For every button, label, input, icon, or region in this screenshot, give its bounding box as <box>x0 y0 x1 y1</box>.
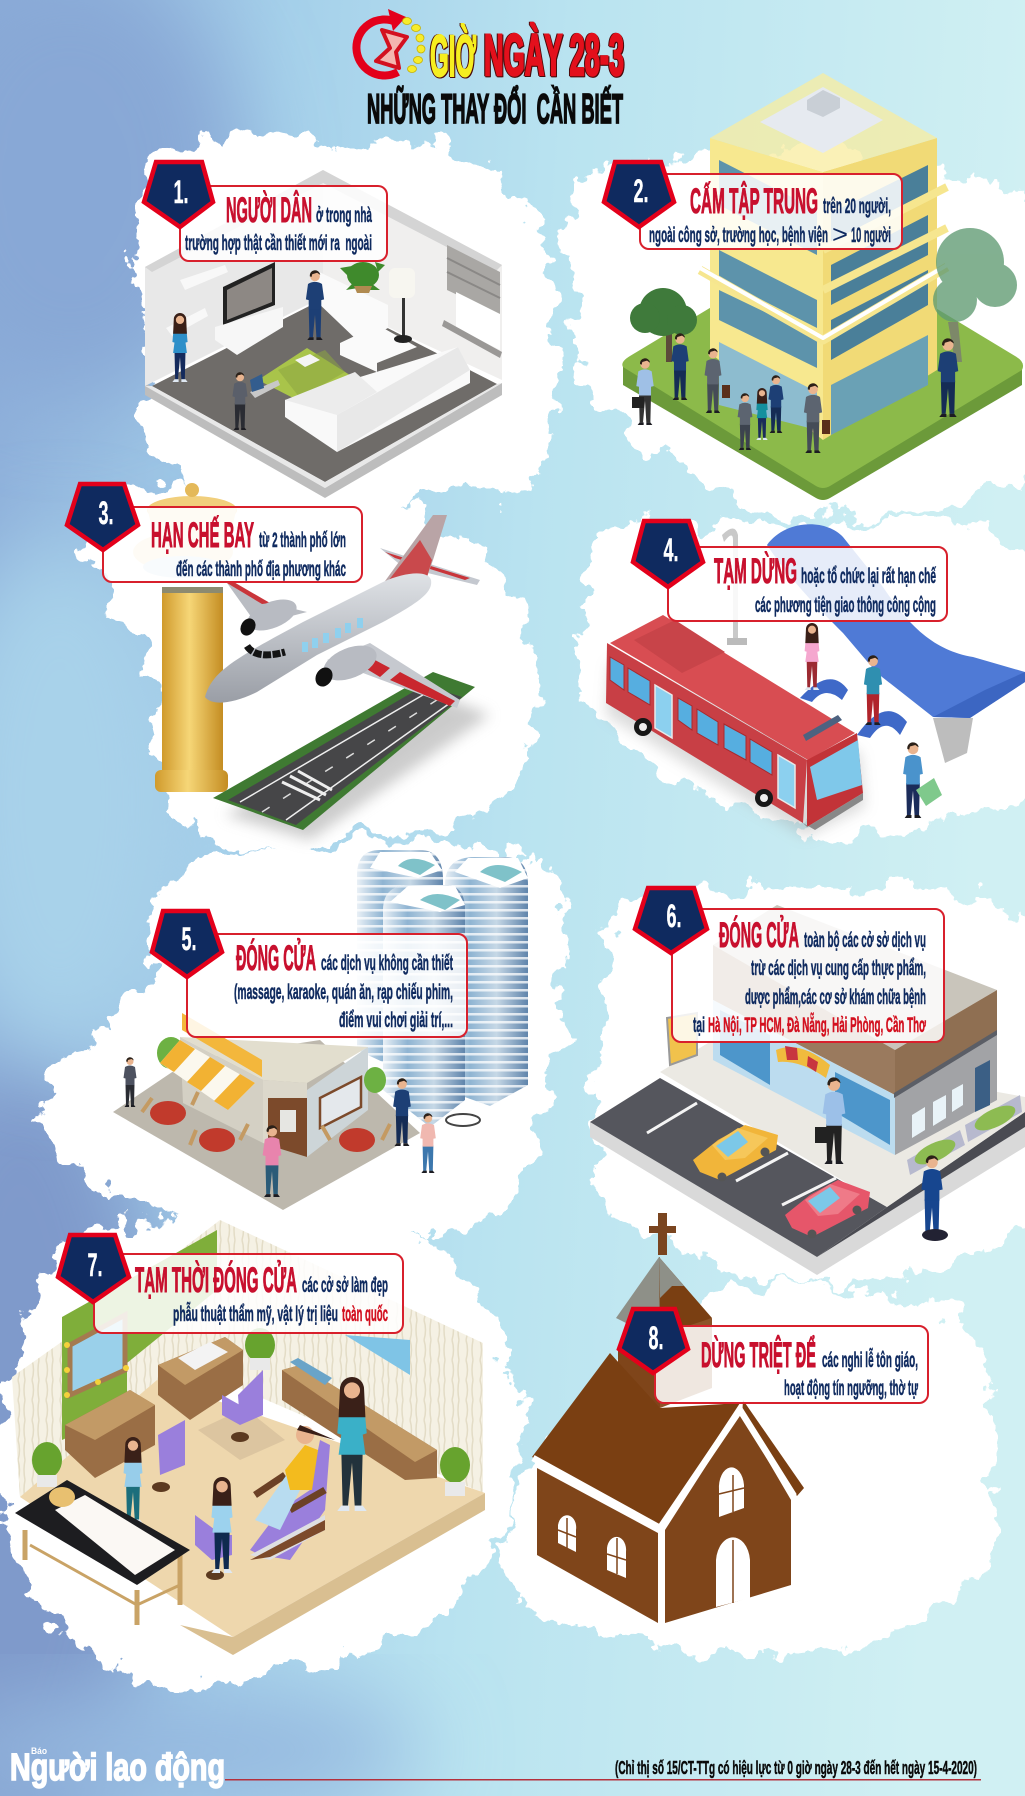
callout: TẠM DỪNG <box>714 551 797 591</box>
title <box>356 9 624 132</box>
windows and door <box>558 1467 750 1607</box>
car: taxi <box>693 1125 778 1182</box>
callout: tại <box>693 1014 705 1037</box>
callout: điểm vui chơi giải trí,... <box>339 1009 453 1032</box>
callout <box>604 162 902 249</box>
callout: DỪNG TRIỆT ĐỂ <box>701 1335 816 1375</box>
badge <box>152 911 222 977</box>
callout: ĐÓNG CỬA <box>236 938 316 978</box>
people: group <box>632 333 958 453</box>
badge <box>604 162 674 227</box>
figure: woman <box>172 313 188 382</box>
illustration: runway <box>213 672 490 840</box>
panel: 7 beauty salons <box>12 1220 485 1655</box>
callout: TẠM THỜI ĐÓNG CỬA <box>135 1260 297 1300</box>
illustration: towers <box>357 850 528 1127</box>
callout: 4. <box>664 532 678 568</box>
figures <box>124 1377 367 1573</box>
callout: HẠN CHẾ BAY <box>151 515 254 555</box>
tree <box>157 1037 185 1069</box>
icon: drone <box>446 1114 480 1126</box>
panel: 1 stay at home <box>144 162 502 498</box>
callout: phẫu thuật thẩm mỹ, vật lý trị liệu <box>173 1302 338 1326</box>
treatment chair <box>250 1440 330 1560</box>
callout: 5. <box>182 921 196 957</box>
callout: 10 người <box>851 224 891 247</box>
figure: man on phone <box>306 270 324 340</box>
illustration: control tower <box>133 483 237 792</box>
illustration: office building <box>622 73 1023 500</box>
furniture: massage bed <box>15 1480 190 1625</box>
car: red <box>785 1180 870 1238</box>
illustration: supermarket <box>590 905 1025 1275</box>
panel: 2 no gatherings <box>604 73 1023 500</box>
figure: seated man <box>232 372 280 430</box>
callout: trường hợp thật cần thiết mới ra ngoài <box>185 232 372 255</box>
panel: 3 flight limits <box>67 483 490 840</box>
title line 1: GIỜ <box>430 24 476 89</box>
callout: 1. <box>174 174 188 210</box>
illustration: bus stop <box>722 524 1025 818</box>
badge <box>619 1309 688 1373</box>
callout: CẤM TẬP TRUNG <box>690 181 818 221</box>
callout: (massage, karaoke, quán ăn, rạp chiếu phim, <box>234 981 453 1004</box>
callout: từ 2 thành phố lớn <box>259 529 346 552</box>
callout: > <box>832 219 848 249</box>
illustration: airplane <box>205 515 480 708</box>
illustration: living room <box>145 170 502 498</box>
callout <box>619 1309 928 1403</box>
panel: 8 religious events <box>532 1213 928 1626</box>
badge <box>67 484 138 550</box>
callout: ở trong nhà <box>316 204 372 227</box>
footer <box>10 1746 981 1789</box>
callout: 2. <box>634 173 648 209</box>
callout: các cở sở làm đẹp <box>302 1274 388 1297</box>
callout: các nghi lễ tôn giáo, <box>822 1348 918 1372</box>
callout <box>144 162 387 261</box>
logo: newspaper name: Báo <box>31 1746 47 1756</box>
callout <box>58 1235 403 1333</box>
callout: các dịch vụ không cần thiết <box>321 952 453 975</box>
footer rule <box>225 1779 981 1780</box>
callout: NGƯỜI DÂN <box>226 190 312 230</box>
illustration: salon <box>12 1220 485 1655</box>
callout: 8. <box>648 1320 664 1356</box>
plants <box>32 1328 470 1483</box>
logo: newspaper name: Người lao động <box>10 1747 225 1789</box>
tables <box>150 1101 375 1152</box>
awning <box>160 1040 255 1110</box>
callout: đến các thành phố địa phương khác <box>176 558 346 581</box>
text: NHỮNG THAY ĐỔI CẦN BIẾT <box>367 83 623 132</box>
benches <box>800 679 907 738</box>
badge <box>144 162 213 227</box>
badge <box>635 888 707 953</box>
callout <box>635 888 944 1042</box>
panel: 6 closed businesses <box>590 888 1025 1275</box>
callout <box>633 521 947 621</box>
figures: waiting passengers <box>805 623 942 818</box>
furniture: counters <box>65 1337 437 1480</box>
illustration: bus <box>606 615 865 837</box>
figures <box>124 1057 436 1197</box>
text: NGÀY 28-3 <box>484 23 624 88</box>
callout: trên 20 người, <box>823 195 891 218</box>
tree: left <box>630 288 697 362</box>
title line 1 <box>430 23 624 89</box>
callout: toàn quốc <box>342 1303 388 1326</box>
chairs <box>158 1370 263 1560</box>
callout <box>67 484 362 582</box>
panel: 4 public transport <box>606 521 1025 837</box>
callout: ĐÓNG CỬA <box>719 915 799 955</box>
illustration: restaurant <box>113 1013 480 1210</box>
icon: clock with hourglass <box>356 9 425 76</box>
callout <box>152 911 467 1037</box>
callout: 3. <box>98 495 114 531</box>
tree: right <box>933 228 1017 362</box>
badge <box>58 1235 129 1302</box>
callout: ngoài công sở, trường học, bệnh viện <box>649 224 828 247</box>
illustration: church <box>532 1213 804 1626</box>
callout: 6. <box>666 898 682 934</box>
callout: 7. <box>88 1247 102 1283</box>
panel: 5 closed services <box>113 850 528 1210</box>
icon: cross <box>649 1213 676 1255</box>
badge <box>633 521 703 587</box>
icon: plant <box>340 262 385 293</box>
figures <box>815 1077 948 1241</box>
